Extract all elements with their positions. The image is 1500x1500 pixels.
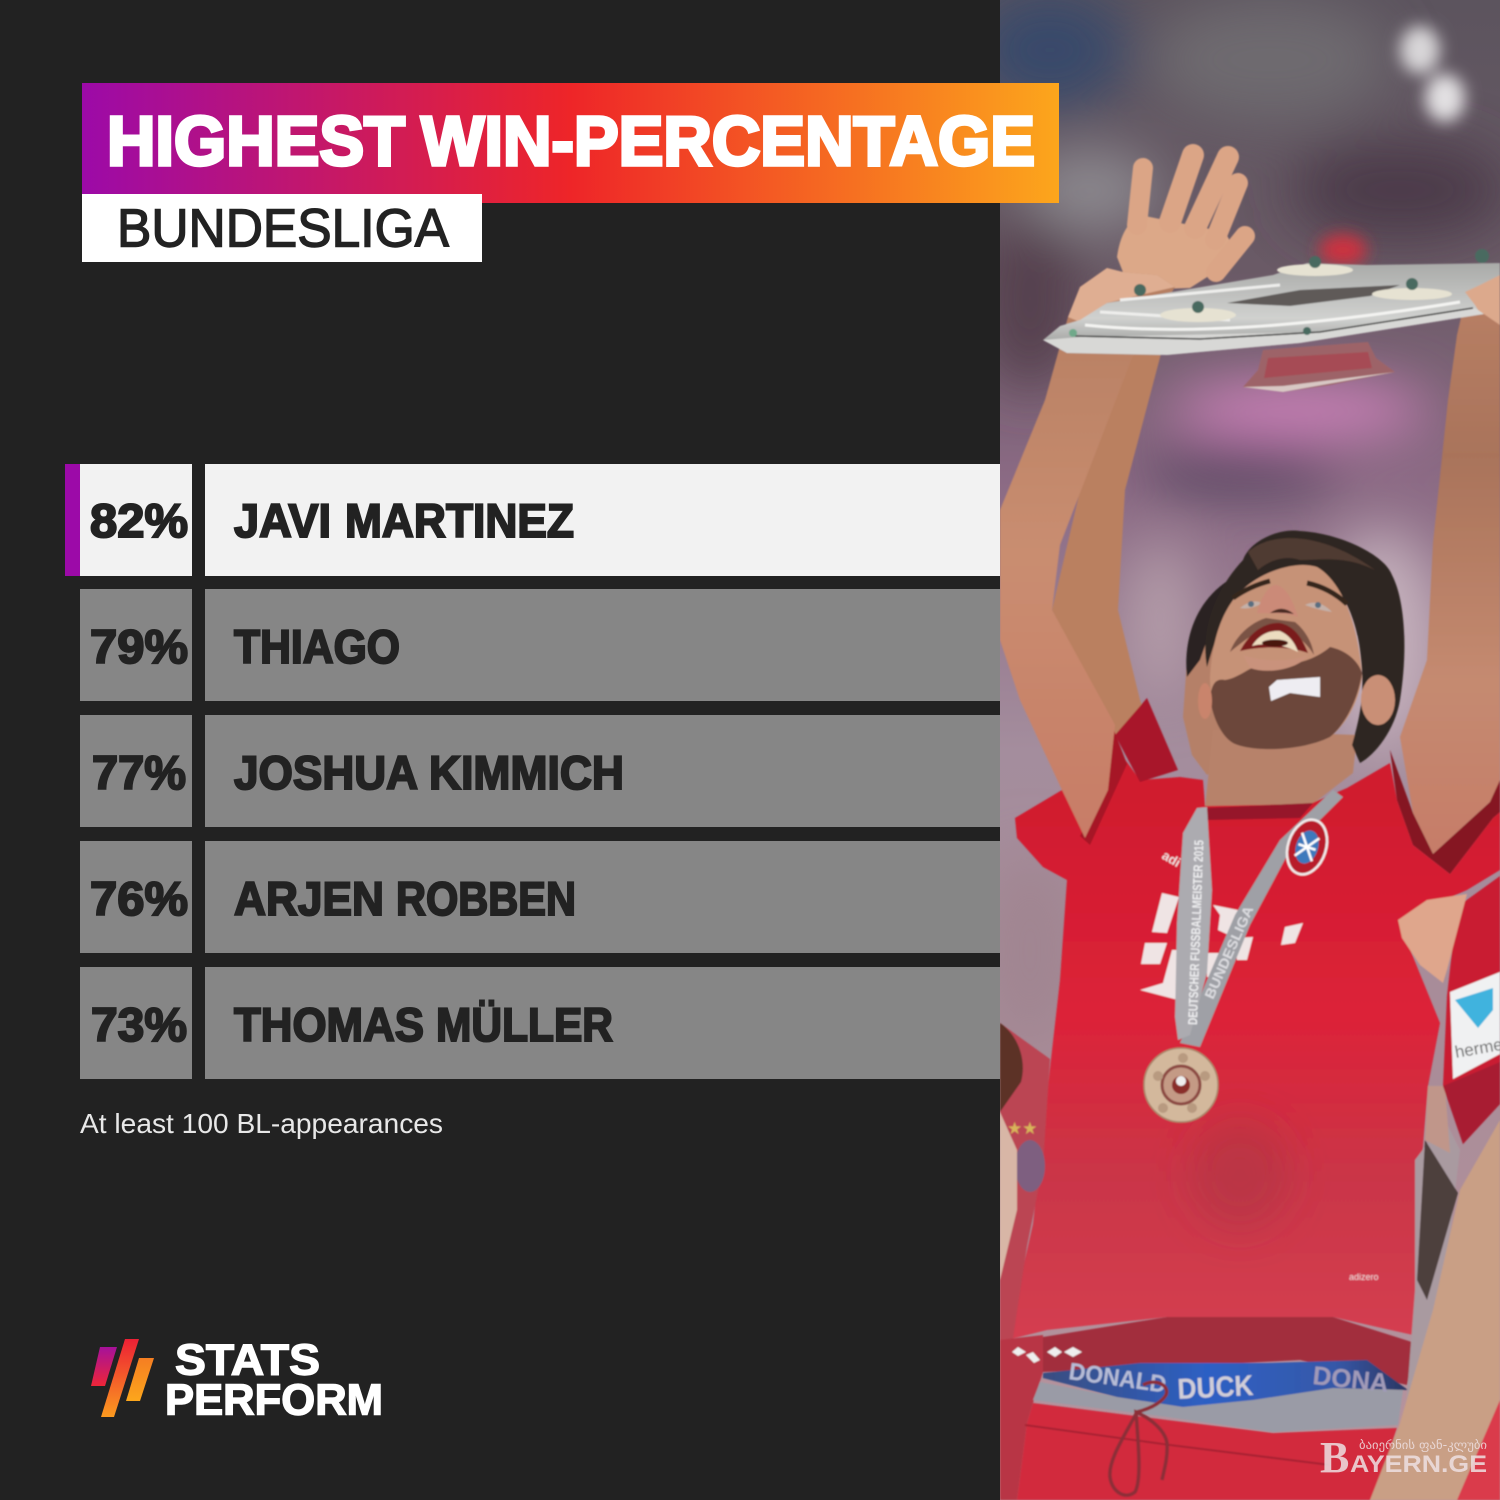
title text: HIGHEST (107, 102, 405, 180)
right teammate arm in foreground (1370, 1120, 1500, 1500)
row 1: Javi Martinez 82% (65, 464, 1000, 576)
row 5: Thomas Müller 73%: THOMAS (234, 998, 424, 1051)
title bar (82, 83, 1059, 203)
row 1: Javi Martinez 82%: 82% (90, 494, 188, 547)
row 1: Javi Martinez 82%: JAVI (234, 494, 331, 547)
right teammate shirt (1443, 876, 1500, 1144)
T-logo on shirt (1140, 893, 1303, 1000)
medal ribbons: BUNDESLIGA (1201, 903, 1256, 1001)
photo background: blurred crowd (970, 0, 1500, 1500)
undershirt band (1020, 1317, 1415, 1385)
shirt folds (1190, 1120, 1290, 1230)
ear (1361, 675, 1395, 725)
row 4: Arjen Robben 76%: 76% (90, 872, 188, 925)
right fingers over plate (1465, 275, 1500, 325)
other player head behind (1182, 582, 1226, 776)
grey underwear (1033, 1382, 1403, 1432)
ribbon lettering: DEUTSCHER FUSSBALLMEISTER 2015 (1185, 840, 1206, 1025)
row 2: Thiago 79%: 79% (90, 620, 188, 673)
club crest (1284, 818, 1330, 877)
neck (1205, 730, 1357, 808)
row 3: Joshua Kimmich 77%: KIMMICH (429, 746, 624, 799)
drawstring (1110, 1382, 1167, 1495)
logo: Stats Perform (91, 1336, 383, 1424)
row 4: Arjen Robben 76%: ARJEN (234, 872, 384, 925)
front left arm (1000, 268, 1175, 838)
trophy well (1227, 285, 1400, 306)
row 5: Thomas Müller 73% (80, 967, 1000, 1079)
subtitle text: BUNDESLIGA (117, 198, 449, 258)
trophy rim (1043, 308, 1490, 355)
row 4: Arjen Robben 76% (80, 841, 1000, 953)
subtitle box (82, 194, 482, 262)
back sleeve of other player (1115, 698, 1178, 782)
sleeve badge (1450, 972, 1500, 1079)
row 3: Joshua Kimmich 77%: 77% (92, 746, 186, 799)
row 3: Joshua Kimmich 77% (80, 715, 1000, 827)
watermark: bayern.ge (1320, 1433, 1487, 1482)
photo: Javi Martinez lifting the trophy (970, 0, 1500, 1500)
right sleeve cuff (1390, 750, 1500, 874)
holding hand (1068, 268, 1175, 322)
shirt torso (1007, 750, 1500, 1340)
row 1: Javi Martinez 82%: MARTINEZ (345, 494, 574, 547)
adidas mark: adi (1160, 848, 1183, 870)
watermark: bayern.ge: B (1320, 1433, 1349, 1482)
hair (1205, 531, 1404, 763)
red shorts (1017, 1403, 1397, 1500)
logo wordmark: STATS (175, 1336, 320, 1384)
hem diamonds (1012, 1347, 1082, 1363)
adizero label: adizero (1349, 1272, 1379, 1282)
red shirt bottom right (1457, 1400, 1500, 1500)
title text: WIN-PERCENTAGE (421, 102, 1035, 180)
brows (1233, 581, 1347, 604)
raised hand behind trophy (1117, 155, 1245, 290)
left teammate (1000, 1023, 1050, 1345)
row 4: Arjen Robben 76%: ROBBEN (396, 872, 576, 925)
mouth (1240, 623, 1308, 653)
skin under teammate's shoulder (1425, 1086, 1450, 1153)
blue waistband (1043, 1360, 1408, 1407)
sleeve cuff of teammate (1443, 1062, 1500, 1144)
waistband text: DONALD (1067, 1358, 1168, 1399)
lower lip skin (1251, 661, 1301, 672)
right arm (1400, 285, 1500, 854)
waistband text: DONA (1311, 1360, 1390, 1398)
moustache (1230, 618, 1314, 655)
trophy plate (1043, 249, 1500, 355)
background gap near right arm (1405, 1120, 1460, 1420)
row 3: Joshua Kimmich 77%: JOSHUA (234, 746, 418, 799)
shorts seam (1025, 1425, 1330, 1465)
chin tape (1269, 677, 1320, 701)
back arm of second player (1052, 350, 1162, 740)
waistband text: DUCK (1177, 1370, 1254, 1406)
left sleeve of shorts region (1000, 1335, 1043, 1500)
face (1210, 565, 1362, 749)
footnote: At least 100 BL-appearances (80, 1108, 443, 1139)
logo wordmark: PERFORM (165, 1376, 383, 1424)
waistband text (1068, 1362, 1387, 1400)
nose (1260, 602, 1263, 606)
row 2: Thiago 79%: THIAGO (234, 620, 400, 673)
shirt collar (1207, 803, 1313, 820)
trophy base (1243, 342, 1395, 392)
teammate hand (1398, 894, 1467, 983)
eyes (1240, 601, 1332, 612)
watermark: bayern.ge: ბაიერნის ფან-კლუბი (1359, 1438, 1487, 1452)
watermark: bayern.ge: AYERN.GE (1350, 1451, 1487, 1478)
logo wordmark (165, 1336, 383, 1424)
left teammate: ★★ (1007, 1119, 1037, 1138)
logo mark (91, 1339, 154, 1417)
tattooed arm (1417, 1140, 1458, 1300)
beard (1210, 647, 1362, 749)
sleeve cuff (1080, 728, 1127, 845)
medal (1144, 1048, 1218, 1122)
row 2: Thiago 79% (80, 589, 1000, 701)
row 5: Thomas Müller 73%: MÜLLER (436, 998, 613, 1051)
row 5: Thomas Müller 73%: 73% (91, 998, 187, 1051)
medal ribbons (1175, 790, 1343, 1047)
